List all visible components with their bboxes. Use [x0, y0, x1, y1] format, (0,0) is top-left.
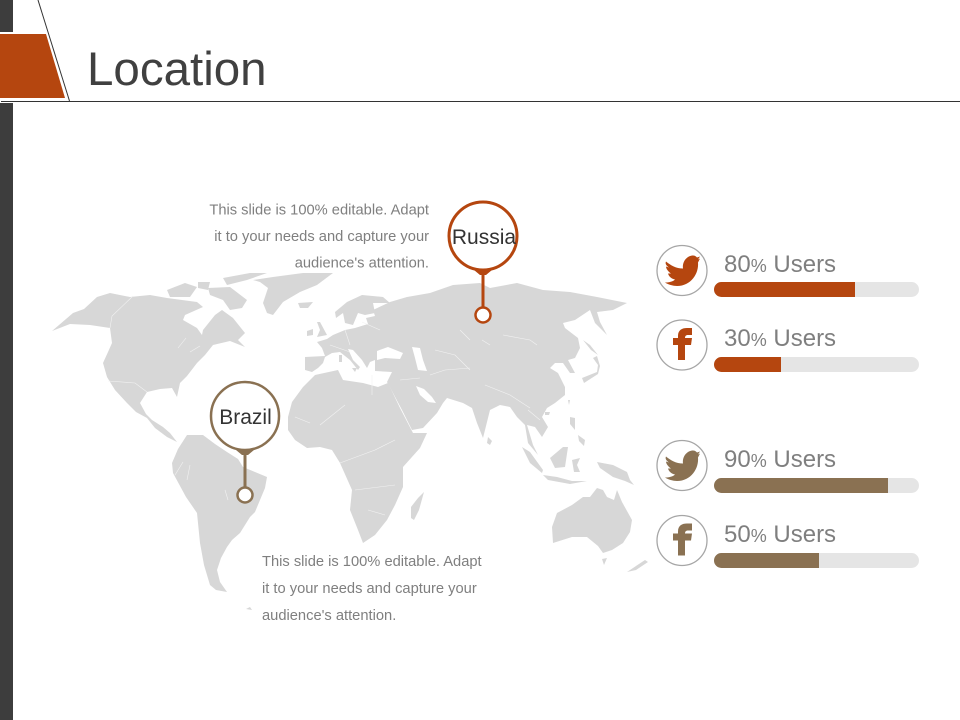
world map	[52, 273, 648, 610]
Madagascar	[411, 492, 424, 520]
progress bar: 30%	[714, 357, 919, 372]
Taiwan and Hainan	[545, 400, 570, 415]
Australia	[552, 488, 632, 553]
text block: Russia description: audience's attention.	[295, 256, 429, 272]
progress bar: 50%	[714, 553, 919, 568]
map pin: Russia: Russia	[452, 226, 516, 249]
label: 80% Users: 80% Users	[724, 251, 836, 278]
header accent shape	[0, 34, 65, 98]
icon: Facebook f brown	[657, 516, 707, 566]
text block: Brazil description: This slide is 100% editable. Adapt	[262, 554, 482, 570]
left side bar	[0, 0, 13, 720]
text block: Brazil description	[262, 554, 482, 624]
Africa	[288, 370, 427, 543]
Sakhalin	[583, 340, 598, 355]
text block: Brazil description: audience's attention.	[262, 608, 396, 624]
icon: Twitter bird brown	[657, 440, 707, 490]
South America	[172, 435, 267, 592]
text block: Russia description: This slide is 100% editable. Adapt	[209, 202, 429, 218]
label: 50% Users: 50% Users	[724, 521, 836, 548]
British Isles	[307, 322, 327, 337]
Scandinavia	[335, 295, 390, 325]
label: 30% Users: 30% Users	[724, 325, 836, 352]
Tasmania and New Zealand	[246, 558, 648, 610]
seas and borders	[377, 347, 436, 403]
title: Location	[87, 43, 267, 96]
stat row: Facebook 30%	[657, 320, 919, 372]
header rule lines	[1, 0, 960, 102]
stat row: Twitter 80%	[657, 246, 919, 297]
progress bar: 80%	[714, 282, 919, 297]
icon: Twitter bird	[657, 246, 707, 296]
Borneo	[550, 447, 568, 468]
text block: Russia description: it to your needs and capture your	[214, 229, 429, 245]
map pin: Brazil	[211, 382, 279, 502]
label: 90% Users: 90% Users	[724, 446, 836, 473]
Arctic islands	[167, 273, 267, 310]
text block: Brazil description: it to your needs and capture your	[262, 581, 477, 597]
Japan	[582, 356, 600, 383]
map pin: Russia	[449, 202, 517, 322]
map pin: Brazil: Brazil	[219, 406, 272, 429]
Mediterranean islands	[339, 355, 357, 372]
Iceland	[298, 302, 313, 308]
Sulawesi and Philippines	[570, 417, 585, 472]
Eurasia	[305, 283, 627, 455]
stat row: Twitter 90%	[657, 440, 919, 493]
Sumatra and Java	[522, 447, 587, 484]
New Guinea	[597, 462, 634, 485]
text block: Russia description	[209, 202, 429, 272]
Greenland	[253, 273, 333, 315]
progress bar: 90%	[714, 478, 919, 493]
stat row: Facebook 50%	[657, 516, 919, 568]
icon: Facebook f	[657, 320, 707, 370]
Sri Lanka	[487, 437, 492, 445]
North America	[52, 293, 245, 442]
